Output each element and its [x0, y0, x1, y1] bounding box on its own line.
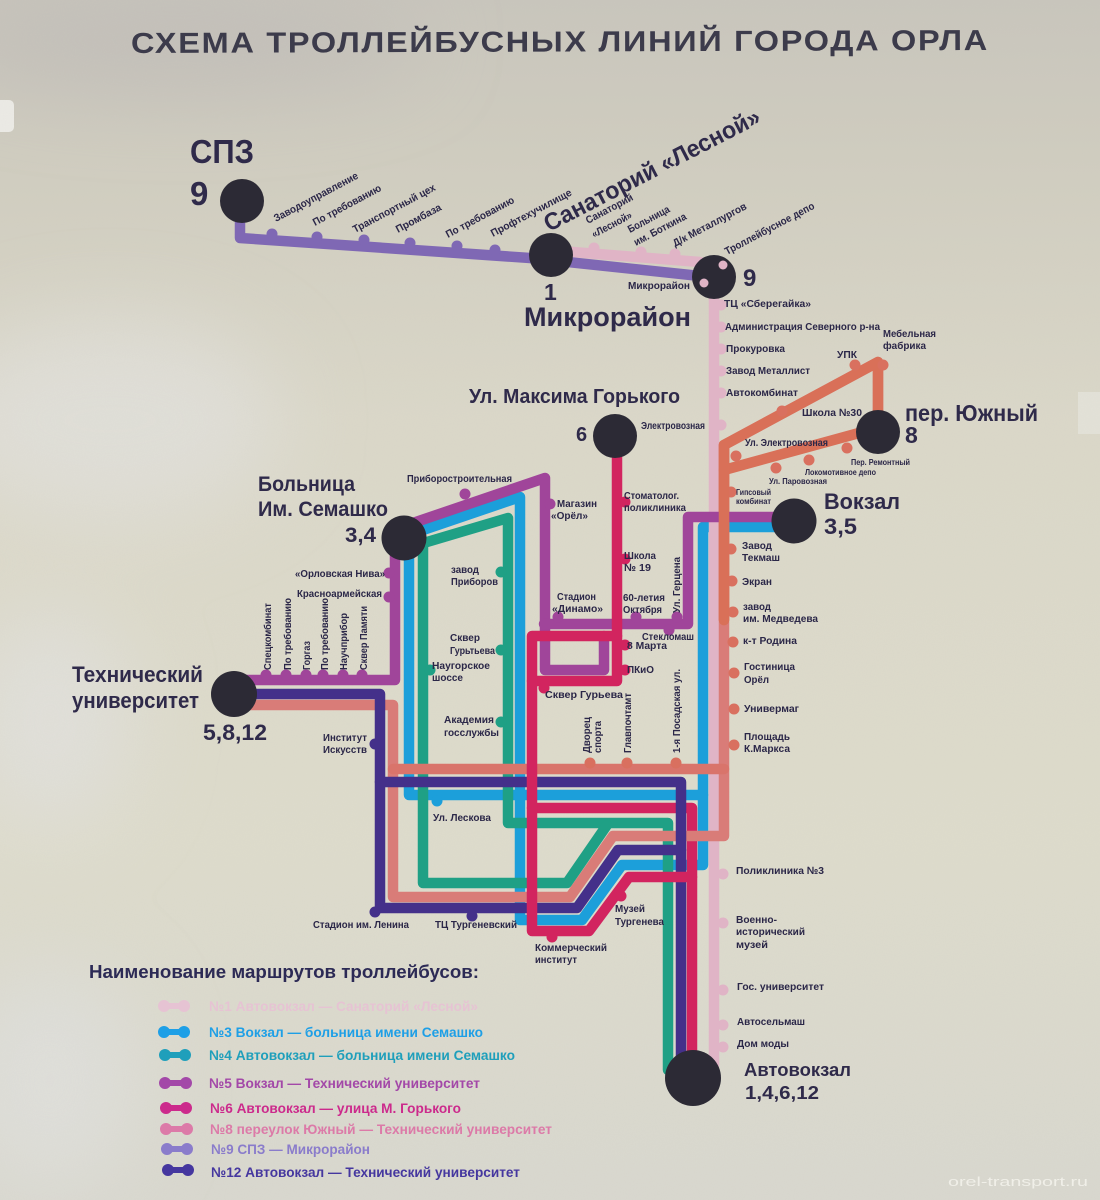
stop labels: centre: Стадион — [557, 591, 596, 603]
stop labels: angled top row: «Лесной» — [590, 209, 634, 241]
route 5 line: magenta-purple — [245, 478, 775, 680]
route 9 line: violet — [240, 215, 700, 276]
stop labels: centre: Стоматолог. — [624, 490, 679, 502]
stop labels: angled top row: Транспортный цех — [351, 182, 438, 236]
stop labels: centre: шоссе — [432, 672, 463, 684]
stop labels: right column: к-т Родина — [743, 635, 797, 647]
stop labels: angled top row: По требованию — [311, 182, 384, 229]
terminal names: Технический — [72, 662, 203, 687]
stop labels: upper right: Пер. Ремонтный — [851, 458, 910, 467]
stop labels: angled top row: По требованию — [444, 194, 517, 241]
legend — [89, 962, 552, 1180]
stop labels: right column: Текмаш — [742, 552, 780, 564]
stop labels: left side: По требованию — [282, 598, 294, 670]
stop labels: centre: Приборов — [451, 576, 498, 588]
stop labels: centre: «Динамо» — [552, 603, 603, 615]
stop labels: upper right: Электровозная — [641, 420, 705, 432]
route 6 line: crimson main — [532, 440, 692, 942]
stop labels: angled top row: Санаторий — [584, 192, 635, 227]
stop labels: centre: Главпочтамт — [622, 693, 634, 753]
terminal names: пер. Южный — [905, 400, 1038, 426]
terminal names: Автовокзал — [744, 1060, 851, 1080]
route 4 line: green — [423, 518, 668, 1070]
route 3 line: blue — [409, 497, 794, 920]
watermark: orel-transport.ru — [948, 1174, 1088, 1189]
terminal names: 5,8,12 — [203, 720, 267, 745]
terminal names: университет — [72, 688, 199, 713]
route 6 line: crimson right branch — [532, 808, 692, 1075]
terminal names: СПЗ — [190, 133, 254, 170]
stop labels: centre: 60-летия — [623, 592, 665, 604]
stop labels: centre: Дворец — [581, 716, 593, 753]
stop labels: angled top row: Профтехучилище — [489, 187, 574, 240]
stop labels: right column: Гостиница — [744, 661, 795, 673]
stop labels: angled top row: Заводоуправление — [272, 170, 361, 225]
terminal stations — [211, 179, 900, 1106]
stop labels: centre: Стекломаш — [642, 631, 694, 643]
legend item: route 4: №4 Автовокзал — больница имени Семашко — [209, 1047, 515, 1063]
stop labels: lower: Стадион им. Ленина — [313, 919, 409, 931]
stop labels: lower: институт — [535, 954, 577, 966]
stop labels: upper right: Ул. Паровозная — [769, 476, 827, 486]
stop labels: left side — [262, 568, 385, 756]
stop labels: left side: Спецкомбинат — [262, 603, 274, 670]
stop labels: centre: Ул. Герцена — [671, 557, 683, 613]
stop labels: upper right: УПК — [837, 349, 858, 361]
terminal names: Ул. Максима Горького — [469, 386, 680, 408]
stop labels: upper right: Администрация Северного р-на — [725, 321, 880, 333]
stop labels: upper right: Микрорайон — [628, 280, 690, 292]
terminal names — [72, 103, 1038, 1103]
legend item: route 9: №9 СПЗ — Микрорайон — [211, 1141, 370, 1157]
stop labels: centre: Школа — [624, 550, 656, 562]
stop labels: centre: ПКиО — [627, 664, 654, 676]
stop labels: right column: Площадь — [744, 731, 791, 743]
stop labels: centre: Наугорское — [432, 660, 490, 672]
stop labels: upper right: Локомотивное депо — [805, 468, 876, 477]
stop labels: centre: Магазин — [557, 498, 597, 510]
stop labels: centre: «Орёл» — [551, 510, 588, 522]
stop labels: upper right: фабрика — [883, 340, 926, 352]
stop labels: left side: Институт — [323, 732, 367, 744]
stop labels: left side: Красноармейская — [297, 588, 382, 600]
stop labels: upper right: ТЦ «Сберегайка» — [724, 298, 811, 310]
stop labels: upper right: Автокомбинат — [726, 387, 798, 399]
stop labels: right column: Автосельмаш — [737, 1016, 805, 1028]
stop labels: right column: Универмаг — [744, 703, 800, 715]
stop labels: centre: поликлиника — [624, 502, 686, 514]
stop labels: angled top row — [272, 170, 817, 258]
stop labels: upper right: Мебельная — [883, 328, 936, 340]
stop labels: right column: К.Маркса — [744, 743, 790, 755]
orange cap: upper trunk over purple — [719, 445, 729, 620]
terminal names: 9 — [743, 265, 756, 292]
route 12 line: navy — [245, 694, 681, 1070]
legend heading: Наименование маршрутов троллейбусов: — [89, 962, 479, 982]
stop labels: lower: Тургенева — [615, 916, 664, 928]
stop labels: angled top row: Д/к Металлургов — [671, 200, 749, 250]
terminal names: 6 — [576, 424, 587, 446]
terminal names: 1,4,6,12 — [745, 1083, 819, 1103]
stop labels: centre: Сквер — [450, 632, 480, 644]
stop labels: right column: Дом моды — [737, 1038, 789, 1050]
stop labels: angled top row: Троллейбусное депо — [723, 200, 817, 258]
stop labels: centre: завод — [451, 564, 479, 576]
legend item: route 3: №3 Вокзал — больница имени Семашко — [209, 1024, 483, 1040]
stop labels: lower: Коммерческий — [535, 942, 607, 954]
terminal names: Микрорайон — [524, 302, 691, 332]
stop labels: centre: Приборостроительная — [407, 473, 512, 485]
legend item: route 5: №5 Вокзал — Технический университет — [209, 1075, 480, 1091]
stop labels: upper right: Завод Металлист — [726, 365, 810, 377]
stop labels: centre: 1-я Посадская ул. — [671, 669, 683, 753]
legend item: route 1: №1 Автовокзал — Санаторий «Лесной» — [209, 998, 478, 1014]
stop labels: angled top row: Больница — [626, 203, 672, 236]
stop labels: left side: Горгаз — [301, 641, 313, 670]
legend item: route 8: №8 переулок Южный — Технический университет — [210, 1121, 552, 1137]
stop labels: upper right: комбинат — [736, 497, 771, 506]
stop labels: right column: Экран — [742, 576, 772, 588]
legend item: route 6: №6 Автовокзал — улица М. Горького — [210, 1100, 461, 1116]
stop labels: right column: Завод — [742, 540, 772, 552]
stop labels: right column: им. Медведева — [743, 613, 818, 625]
stop labels: centre: спорта — [592, 721, 604, 753]
terminal names: Им. Семашко — [258, 498, 388, 521]
stop labels: centre: Гурьтьева — [450, 645, 495, 657]
stop labels: right column: Орёл — [744, 674, 769, 686]
route 1 line: pink — [560, 242, 728, 1065]
stop labels: left side: Сквер Памяти — [358, 606, 370, 670]
terminal names: 8 — [905, 422, 918, 448]
stop labels: right column: Поликлиника №3 — [736, 865, 824, 877]
terminal names: 3,5 — [824, 514, 857, 539]
stop labels: lower: ТЦ Тургеневский — [435, 919, 517, 931]
stop labels: angled top row: Промбаза — [394, 202, 444, 236]
route 8 line: salmon — [240, 360, 888, 897]
stop labels: right column: завод — [743, 601, 771, 613]
stop labels: centre: № 19 — [624, 562, 651, 574]
stop labels: upper right: Гипсовый — [736, 488, 771, 497]
stop labels: upper right: Ул. Электровозная — [745, 437, 828, 449]
route network map — [211, 179, 900, 1106]
stop labels: centre: Октября — [623, 604, 662, 616]
stop labels: centre: Сквер Гурьева — [545, 689, 623, 701]
stop labels: centre: Академия — [444, 714, 494, 726]
terminal names: Больница — [258, 473, 355, 496]
stop labels: lower: Музей — [615, 903, 645, 915]
title: СХЕМА ТРОЛЛЕЙБУСНЫХ ЛИНИЙ ГОРОДА ОРЛА — [131, 23, 989, 60]
stop labels: right column: музей — [736, 939, 768, 951]
stop labels: left side: По требованию — [319, 598, 331, 670]
terminal names: 1 — [544, 279, 557, 305]
terminal names: Вокзал — [824, 489, 900, 514]
terminal names: 3,4 — [345, 524, 376, 547]
stop labels: upper right: Школа №30 — [802, 407, 862, 419]
stop labels: centre — [407, 473, 694, 824]
stop labels: left side: «Орловская Нива» — [295, 568, 385, 580]
stop labels: left side: Научприбор — [338, 613, 350, 670]
stop labels: right column — [736, 540, 824, 1050]
stop labels: centre: госслужбы — [444, 727, 499, 739]
terminal names: Санаторий «Лесной» — [539, 103, 765, 237]
stop labels: upper right: Прокуровка — [726, 343, 785, 355]
stop labels: right column: Военно- — [736, 914, 777, 926]
stop labels: right column: исторический — [736, 926, 805, 938]
stop labels: angled top row: им. Боткина — [632, 211, 689, 249]
stop labels: lower — [313, 903, 664, 966]
terminal names: 9 — [190, 175, 208, 212]
stop labels: upper right — [628, 280, 936, 506]
legend item: route 12: №12 Автовокзал — Технический университет — [211, 1164, 520, 1180]
stop labels: right column: Гос. университет — [737, 981, 824, 993]
stop labels: left side: Искусств — [323, 744, 368, 756]
stop labels: centre: Ул. Лескова — [433, 812, 491, 824]
stop labels: centre: 8 Марта — [627, 640, 667, 652]
